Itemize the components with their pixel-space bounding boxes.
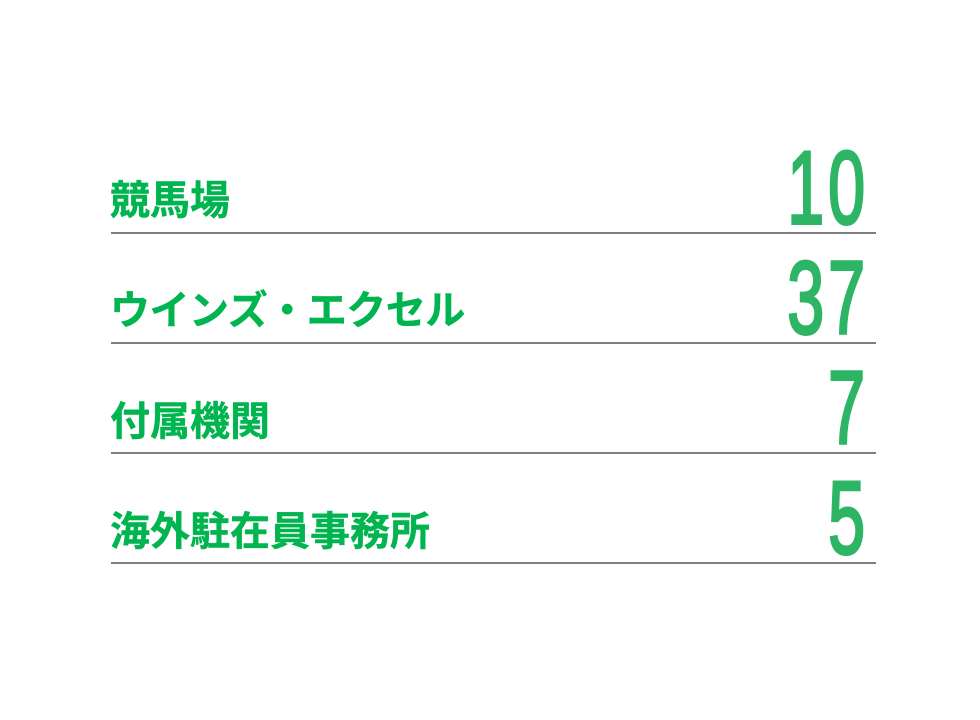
number: 37: 37 <box>787 239 869 356</box>
row: ウインズ・エクセル <box>110 239 876 356</box>
label: 競馬場: 競馬場 <box>110 179 230 223</box>
number: 5: 5 <box>828 459 869 576</box>
row: 付属機関 <box>110 349 876 466</box>
number: 7: 7 <box>828 349 869 466</box>
row: 海外駐在員事務所 <box>110 459 876 576</box>
label: 付属機関: 付属機関 <box>110 400 270 444</box>
label: 海外駐在員事務所: 海外駐在員事務所 <box>110 510 430 554</box>
label: ウインズ・エクセル: ウインズ・エクセル <box>110 289 465 333</box>
number: 10: 10 <box>787 129 869 246</box>
row: 競馬場 <box>110 129 876 246</box>
